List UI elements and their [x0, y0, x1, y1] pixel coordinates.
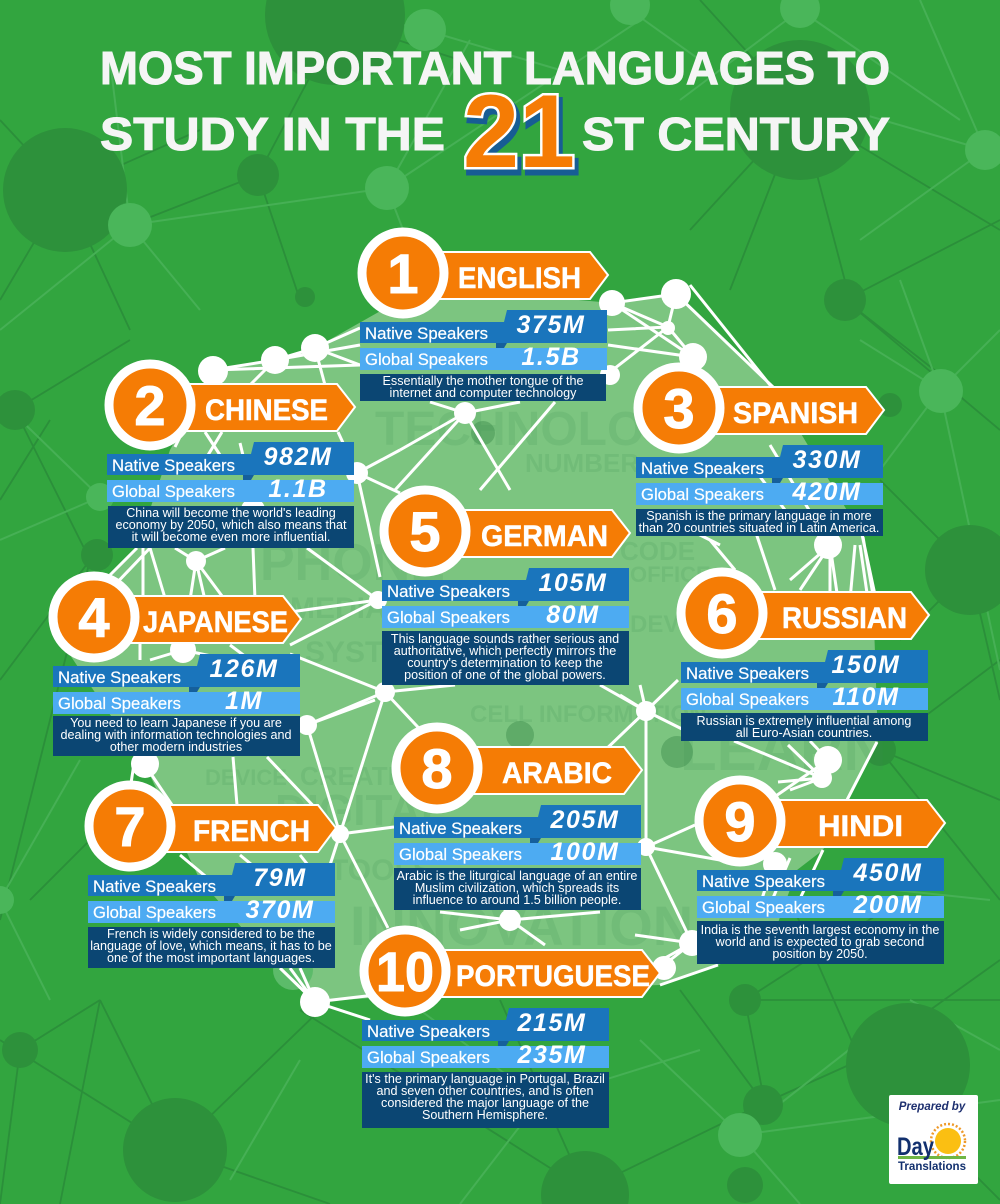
description: world and is expected to grab second [715, 935, 924, 949]
word cloud: CREATIVE [300, 761, 430, 791]
description [88, 927, 335, 968]
global speakers bar [382, 601, 629, 629]
global speakers bar: Global Speakers [367, 1048, 490, 1067]
global speakers bar: 1.1B [268, 475, 328, 503]
native speakers bar: Native Speakers [93, 877, 216, 896]
badge and name [396, 727, 642, 809]
native speakers bar [88, 863, 335, 901]
native speakers bar: 126M [210, 655, 278, 683]
global speakers bar [88, 896, 335, 924]
badge and name [362, 232, 608, 314]
title: MOST IMPORTANT LANGUAGES TO [100, 42, 890, 94]
native speakers bar [382, 568, 629, 606]
global speakers bar: 110M [832, 683, 900, 711]
title [100, 42, 890, 160]
description: influence to around 1.5 billion people. [413, 893, 621, 907]
description: it will become even more influential. [132, 530, 330, 544]
global speakers bar [107, 475, 354, 503]
badge and name: CHINESE [205, 394, 328, 427]
network nodes [131, 279, 842, 1017]
global speakers bar: 1M [225, 687, 263, 715]
card 6: Russian [681, 572, 929, 741]
title: ST CENTURY [582, 108, 890, 160]
global speakers bar: Global Speakers [112, 482, 235, 501]
description: Spanish is the primary language in more [646, 509, 872, 523]
badge and name: 6 [706, 582, 738, 645]
description: India is the seventh largest economy in the [701, 923, 939, 937]
badge and name: FRENCH [193, 815, 310, 848]
word cloud: SYSTEM [305, 636, 428, 669]
global speakers bar: Global Speakers [365, 350, 488, 369]
description [108, 506, 354, 548]
description: economy by 2050, which also means that [115, 518, 347, 532]
icon: sun [931, 1124, 965, 1158]
global speakers bar: Global Speakers [641, 485, 764, 504]
badge and name [699, 780, 945, 862]
native speakers bar: Native Speakers [58, 668, 181, 687]
native speakers bar: Native Speakers [399, 819, 522, 838]
native speakers bar: Native Speakers [641, 459, 764, 478]
badge and name: 5 [409, 500, 441, 563]
description: other modern industries [110, 740, 242, 754]
description: country's determination to keep the [407, 656, 603, 670]
description: You need to learn Japanese if you are [70, 716, 282, 730]
global speakers bar [697, 891, 944, 919]
word cloud: DEVICE [205, 765, 287, 790]
badge and name: ENGLISH [458, 262, 581, 295]
word cloud [205, 403, 887, 957]
global speakers bar: 1.5B [521, 343, 581, 371]
global speakers bar: Global Speakers [387, 608, 510, 627]
description [360, 374, 606, 401]
card 7: French [88, 785, 336, 968]
word cloud: OFFICE [630, 562, 711, 587]
description: than 20 countries situated in Latin America. [639, 521, 879, 535]
global speakers bar: 80M [546, 601, 600, 629]
native speakers bar [360, 310, 607, 348]
prepared by label: Prepared by [899, 1101, 966, 1113]
badge and name: 8 [421, 737, 453, 800]
badge and name [364, 930, 660, 1012]
description [382, 631, 629, 685]
badge and name [53, 576, 301, 658]
description [681, 713, 928, 741]
badge and name: 10 [376, 940, 434, 1003]
native speakers bar [697, 858, 944, 896]
description: Russian is extremely influential among [697, 714, 911, 728]
native speakers bar: Native Speakers [367, 1022, 490, 1041]
description: Muslim civilization, which spreads its [415, 881, 619, 895]
badge and name [681, 572, 929, 654]
badge and name [89, 785, 336, 867]
badge and name: PORTUGUESE [456, 960, 650, 993]
description: one of the most important languages. [107, 951, 315, 965]
native speakers bar: 375M [517, 311, 585, 339]
logo wordmark: Translations: Translations [898, 1159, 966, 1173]
badge and name [109, 364, 355, 446]
badge and name: 4 [78, 586, 110, 649]
word cloud: CELL INFORMATION [470, 701, 706, 728]
card 4: Japanese [53, 576, 301, 756]
global speakers bar [681, 683, 928, 711]
network links [110, 285, 877, 1020]
native speakers bar: Native Speakers [702, 872, 825, 891]
title number 21: 21 [463, 74, 575, 190]
native speakers bar: Native Speakers [387, 582, 510, 601]
global speakers bar: 370M [246, 896, 314, 924]
badge and name [638, 367, 884, 449]
logo card: prepared by Day Translations [889, 1095, 978, 1184]
native speakers bar: Native Speakers [365, 324, 488, 343]
native speakers bar: Native Speakers [112, 456, 235, 475]
word cloud: TECHNOLOGY [375, 403, 714, 456]
native speakers bar [362, 1008, 609, 1046]
global speakers bar: 420M [792, 478, 861, 506]
description: It's the primary language in Portugal, Brazil [365, 1072, 605, 1086]
global speakers bar [362, 1041, 609, 1069]
card 1: English [360, 232, 608, 401]
global speakers bar: Global Speakers [58, 694, 181, 713]
description: Southern Hemisphere. [422, 1108, 548, 1122]
description: China will become the world's leading [126, 506, 336, 520]
native speakers bar [636, 445, 883, 483]
word cloud: MEDIA [290, 592, 387, 625]
description: internet and computer technology [390, 386, 577, 400]
native speakers bar: 150M [832, 651, 900, 679]
badge and name [384, 490, 630, 572]
global speakers bar: Global Speakers [686, 690, 809, 709]
description: dealing with information technologies and [60, 728, 292, 742]
word cloud: NUMBER [525, 448, 639, 478]
badge and name: 2 [134, 374, 166, 437]
description: Essentially the mother tongue of the [383, 374, 583, 388]
global speakers bar: Global Speakers [702, 898, 825, 917]
global speakers bar: 100M [551, 838, 619, 866]
word cloud: DEVICE [630, 611, 719, 638]
description: position by 2050. [772, 947, 868, 961]
inner faint circles [273, 421, 693, 990]
word cloud: LEARN [680, 716, 887, 783]
native speakers bar [681, 650, 928, 688]
title number 21: 21 [466, 79, 578, 195]
description [697, 921, 944, 964]
native speakers bar: 105M [539, 569, 607, 597]
word cloud: DIGITAL [275, 786, 448, 835]
card 8: Arabic [394, 727, 642, 910]
description: This language sounds rather serious and [391, 632, 619, 646]
logo wordmark: Day: Day [897, 1133, 934, 1161]
native speakers bar: 982M [264, 443, 332, 471]
card 10: Portuguese [362, 930, 660, 1128]
description: all Euro-Asian countries. [736, 726, 872, 740]
description: language of love, which means, it has to be [90, 939, 332, 953]
global speakers bar: Global Speakers [93, 903, 216, 922]
green band [898, 1156, 966, 1159]
global speakers bar: 235M [517, 1041, 586, 1069]
global speakers bar [394, 838, 641, 866]
badge and name: 3 [663, 377, 695, 440]
central network panel [60, 292, 878, 1002]
global speakers bar [636, 478, 883, 506]
native speakers bar: 215M [517, 1009, 586, 1037]
badge and name: RUSSIAN [782, 602, 907, 635]
description: French is widely considered to be the [107, 927, 315, 941]
description: considered the major language of the [381, 1096, 589, 1110]
global speakers bar [360, 343, 607, 371]
word cloud: TOOLS [330, 854, 433, 887]
native speakers bar: 79M [253, 864, 307, 892]
badge and name: 1 [387, 242, 419, 305]
native speakers bar: Native Speakers [686, 664, 809, 683]
badge and name: JAPANESE [143, 606, 288, 639]
card 3: Spanish [636, 367, 884, 536]
description [362, 1072, 609, 1128]
word cloud: CODE [620, 536, 695, 566]
badge and name: 7 [114, 795, 146, 858]
badge and name: HINDI [818, 810, 903, 843]
description: position of one of the global powers. [404, 668, 606, 682]
badge and name: ARABIC [502, 757, 612, 790]
word cloud: PHONE [260, 534, 445, 592]
card 2: Chinese [107, 364, 355, 548]
description: and seven other countries, and is often [376, 1084, 594, 1098]
description [53, 716, 300, 756]
title: STUDY IN THE [100, 108, 445, 160]
word cloud: INNOVATION [350, 894, 693, 957]
native speakers bar: 330M [793, 446, 861, 474]
badge and name: SPANISH [733, 397, 858, 430]
description [636, 509, 883, 536]
description: Arabic is the liturgical language of an entire [397, 869, 637, 883]
global speakers bar: Global Speakers [399, 845, 522, 864]
global speakers bar [53, 687, 300, 715]
native speakers bar [53, 654, 300, 692]
native speakers bar [107, 442, 354, 480]
description [394, 868, 641, 910]
native speakers bar [394, 805, 641, 843]
global speakers bar: 200M [853, 891, 922, 919]
card 9: Hindi [697, 780, 945, 964]
badge and name: 9 [724, 790, 756, 853]
description: authoritative, which perfectly mirrors the [394, 644, 616, 658]
badge and name: GERMAN [481, 520, 608, 553]
card 5: German [382, 490, 630, 685]
native speakers bar: 450M [853, 859, 922, 887]
native speakers bar: 205M [550, 806, 619, 834]
